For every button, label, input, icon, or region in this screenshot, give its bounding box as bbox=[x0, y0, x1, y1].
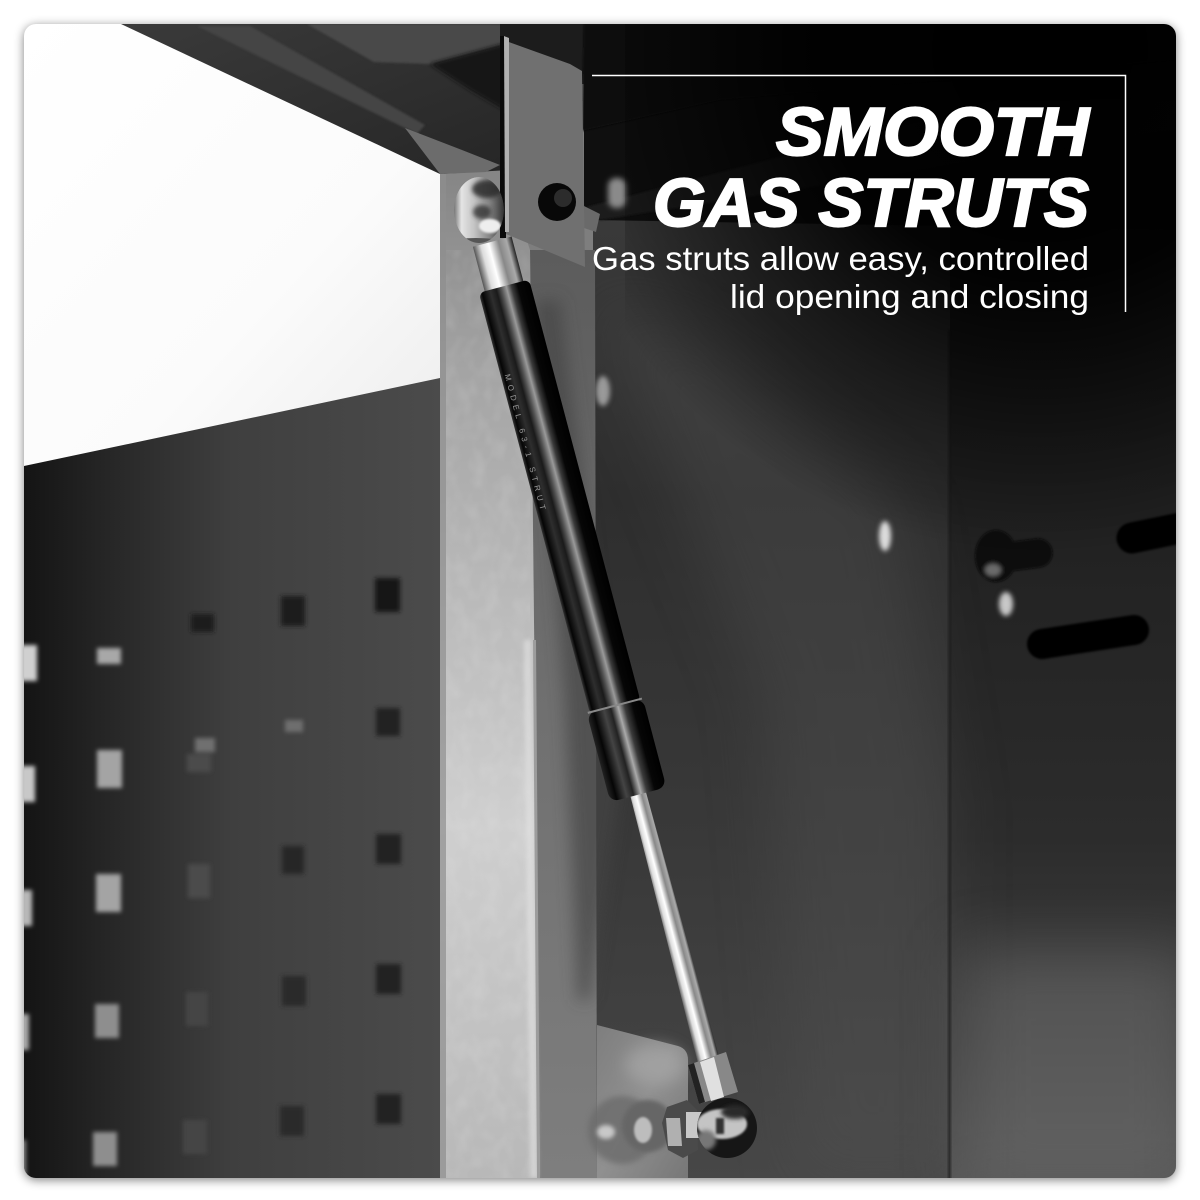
top ball joint bbox=[454, 177, 504, 244]
tube lower sleeve bbox=[587, 698, 666, 802]
title: SMOOTH bbox=[776, 94, 1091, 170]
white column front bbox=[440, 170, 540, 1178]
gas strut bbox=[473, 236, 718, 1062]
bracket bolt bbox=[538, 183, 576, 221]
wall highlight bbox=[652, 354, 920, 936]
pegboard panel bbox=[20, 378, 440, 1178]
slots and bolt bbox=[596, 376, 1190, 644]
upper neck bbox=[473, 237, 525, 299]
subtitle: Gas struts allow easy, controlled bbox=[592, 240, 1089, 277]
side face of column bbox=[530, 250, 597, 1178]
title: GAS STRUTS bbox=[653, 165, 1089, 241]
bright background area bbox=[24, 24, 444, 474]
lower hinge plate bbox=[588, 1025, 688, 1178]
title bbox=[653, 94, 1091, 241]
subtitle bbox=[592, 240, 1089, 315]
strut shadow on column side bbox=[536, 300, 609, 1003]
rod bbox=[626, 785, 720, 1066]
bottom ball joint bbox=[662, 1052, 759, 1160]
bracket bbox=[500, 36, 585, 267]
main tube bbox=[479, 279, 640, 714]
title frame lines bbox=[592, 76, 1126, 312]
pegboard holes bbox=[20, 578, 401, 1176]
subtitle: lid opening and closing bbox=[730, 278, 1089, 315]
right cabinet wall bbox=[593, 205, 1195, 1190]
top-right dark overlay bbox=[625, 24, 1176, 489]
tube lettering: MODEL 63-1 STRUT bbox=[503, 373, 547, 511]
panel seam bbox=[948, 330, 951, 1180]
top dark frame bbox=[121, 24, 1176, 232]
